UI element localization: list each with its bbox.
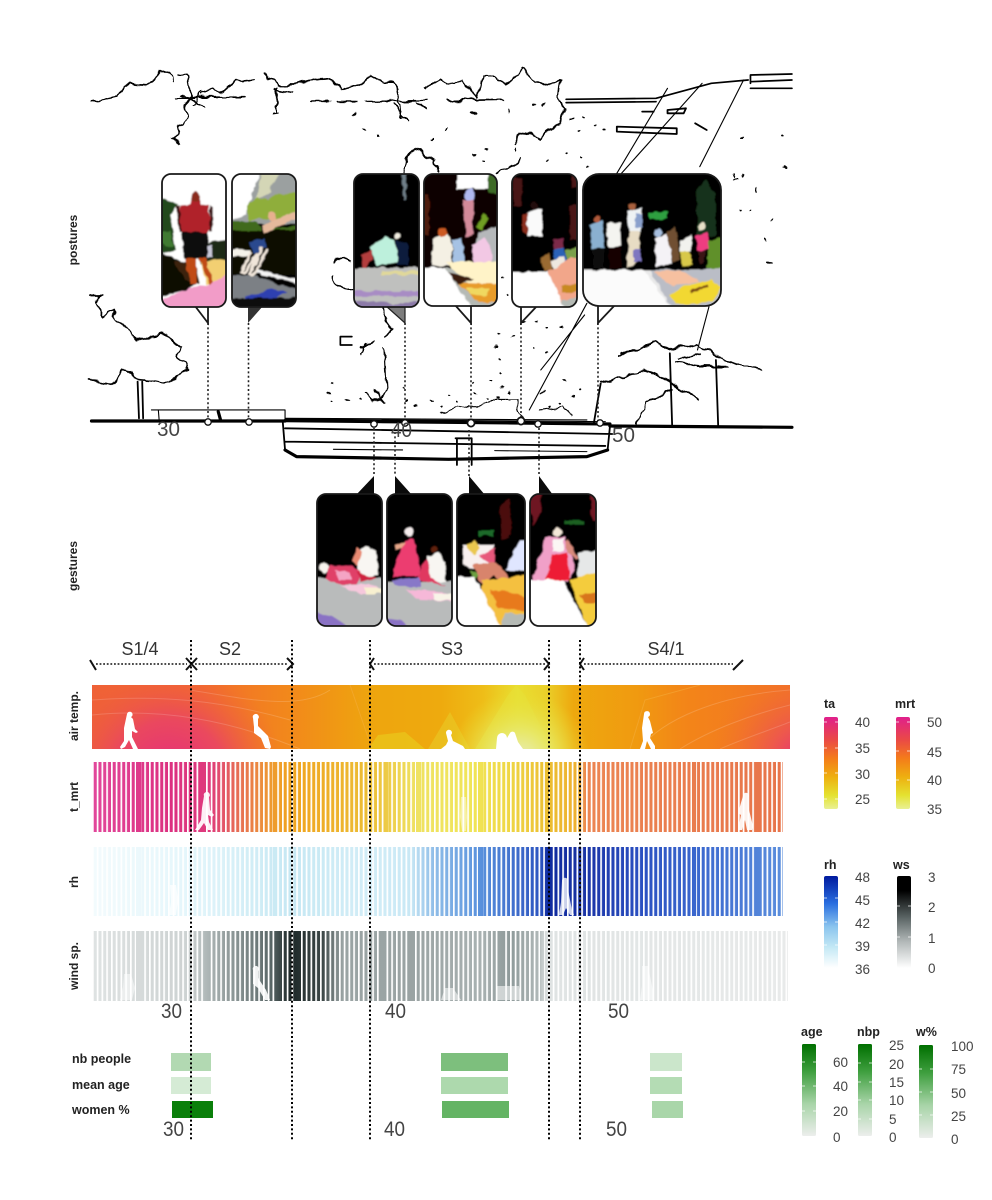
photo bubble: gesture, woman turning [529, 476, 597, 627]
walker silhouettes on air temperature band [120, 711, 655, 749]
photo bubble: woman leaning on bench [231, 173, 297, 323]
scale markers under statistics: 50 [606, 1118, 627, 1141]
legend: number of people: nbp [857, 1025, 880, 1039]
legend: wind speed: 0 [928, 961, 936, 976]
photo bubble: group by the planter [423, 173, 498, 326]
legend: number of people: 0 [889, 1130, 897, 1145]
legend: percentage of women: w% [915, 1025, 937, 1039]
legend: air temperature [824, 697, 870, 809]
scale markers under climate bands: 30 [161, 1000, 182, 1023]
legend: relative humidity: 39 [855, 939, 870, 954]
legend: percentage of women [915, 1025, 974, 1147]
walker silhouettes on humidity band [169, 878, 574, 915]
photo bubble: standing woman [161, 173, 227, 326]
legend: mean age: 0 [833, 1130, 841, 1145]
scale markers under statistics: 40 [384, 1118, 405, 1141]
legend: wind speed: ws [892, 858, 910, 872]
section distance markers [157, 418, 635, 447]
legend: mean age [801, 1025, 848, 1145]
connector lines: bubbles to section [205, 323, 603, 476]
legend: wind speed: 3 [928, 870, 936, 885]
legend: mean radiant temperature: 40 [927, 773, 942, 788]
legend: mean radiant temperature: 45 [927, 745, 942, 760]
legend: percentage of women: 75 [951, 1062, 966, 1077]
band: air temperature contour map [92, 685, 790, 749]
legend: number of people: 15 [889, 1075, 904, 1090]
section distance markers: 40 [391, 419, 412, 442]
legend: percentage of women: 25 [951, 1109, 966, 1124]
label: gestures: gestures [66, 541, 80, 591]
legend: wind speed: 2 [928, 900, 936, 915]
photo bubble: gesture, seated woman on planter [456, 476, 526, 627]
photo bubble: pedestrians in shade [511, 173, 578, 326]
legend: percentage of women: 100 [951, 1039, 974, 1054]
legend: relative humidity: 42 [855, 916, 870, 931]
walker silhouettes on radiant temperature band [195, 792, 753, 831]
heat map: people statistics: women % [71, 1103, 130, 1117]
photo bubble: crouching man [353, 173, 420, 324]
legend: mean radiant temperature [895, 697, 942, 817]
band labels: air temp. [67, 691, 81, 741]
legend: air temperature: 35 [855, 741, 870, 756]
photo bubble: gesture, reclining figures [316, 476, 383, 627]
heat map: people statistics: mean age [72, 1078, 130, 1092]
legend: wind speed: 1 [928, 931, 936, 946]
walker silhouettes on wind band [120, 966, 654, 1000]
band labels: wind sp. [67, 942, 81, 991]
legend: mean age: age [801, 1025, 823, 1039]
scale markers under climate bands: 40 [385, 1000, 406, 1023]
legend: number of people: 5 [889, 1112, 897, 1127]
band labels: t_mrt [67, 782, 81, 812]
section distance markers: 50 [612, 424, 635, 447]
section labels and extents [90, 639, 743, 670]
legend: wind speed [892, 858, 936, 976]
band: relative humidity stripes [92, 847, 783, 916]
sketch: street section drawing [92, 68, 792, 465]
legend: percentage of women: 0 [951, 1132, 959, 1147]
legend: mean age: 40 [833, 1079, 848, 1094]
scale markers under climate bands: 50 [608, 1000, 629, 1023]
heat map: people statistics [71, 1052, 683, 1118]
legend: number of people: 25 [889, 1038, 904, 1053]
legend: relative humidity: 36 [855, 962, 870, 977]
vertical section dividers [191, 640, 580, 1141]
legend: relative humidity: rh [824, 858, 836, 872]
legend: mean age: 60 [833, 1055, 848, 1070]
label: postures: postures [66, 214, 80, 265]
scale markers under statistics: 30 [163, 1118, 184, 1141]
heat map: people statistics: nb people [72, 1052, 131, 1066]
legend: air temperature: 25 [855, 792, 870, 807]
section labels and extents: S4/1 [647, 639, 685, 659]
legend: relative humidity: 45 [855, 893, 870, 908]
photo bubble: gesture, woman in pink dress [386, 476, 453, 627]
band labels: rh [67, 876, 81, 888]
legend: air temperature: ta [824, 697, 836, 711]
legend: percentage of women: 50 [951, 1086, 966, 1101]
section labels and extents: S2 [219, 639, 241, 659]
scale markers under climate bands [161, 1000, 629, 1023]
legend: air temperature: 30 [855, 767, 870, 782]
legend: mean radiant temperature: 35 [927, 802, 942, 817]
legend: mean radiant temperature: mrt [895, 697, 916, 711]
photo bubble: crowd of visitors [582, 173, 722, 326]
legend: number of people: 20 [889, 1057, 904, 1072]
legend: air temperature: 40 [855, 715, 870, 730]
band: mean radiant temperature stripes [92, 762, 783, 832]
section labels and extents: S1/4 [121, 639, 159, 659]
legend: mean age: 20 [833, 1104, 848, 1119]
legend: mean radiant temperature: 50 [927, 715, 942, 730]
band labels [67, 691, 81, 991]
legend: relative humidity: 48 [855, 870, 870, 885]
scale markers under statistics [163, 1118, 627, 1141]
section distance markers: 30 [157, 418, 180, 441]
legend: relative humidity [824, 858, 870, 977]
section labels and extents: S3 [441, 639, 463, 659]
legend: number of people [857, 1025, 904, 1145]
legend: number of people: 10 [889, 1093, 904, 1108]
band: wind speed stripes [92, 931, 788, 1001]
